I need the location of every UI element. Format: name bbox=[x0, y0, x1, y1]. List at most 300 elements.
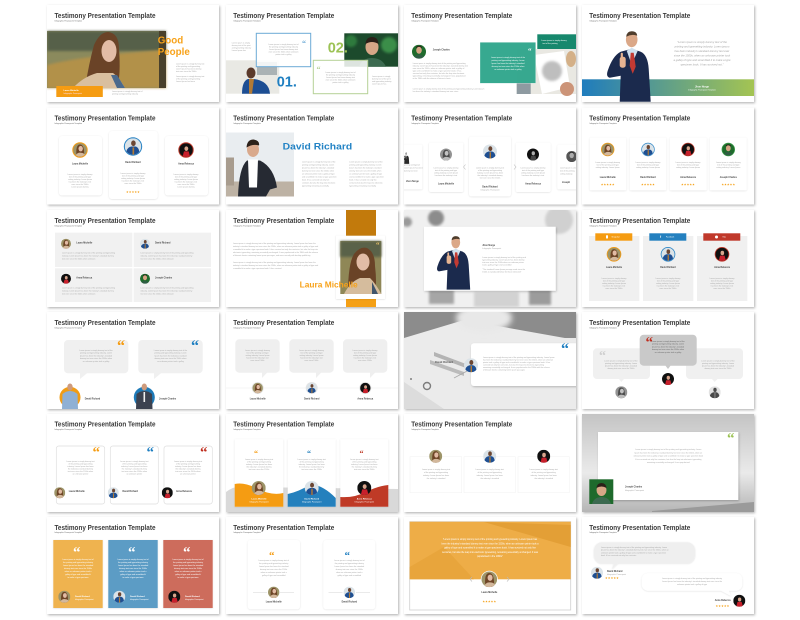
card: Facebook: has been the industry's text bbox=[657, 284, 680, 288]
person: David Richard bbox=[60, 384, 101, 409]
card: Laura Michelle: Laura Michelle bbox=[251, 498, 267, 500]
card: Snapchat: Snapchat bbox=[612, 236, 620, 239]
framed panel: galley of type and scrambled it to make a type specimen book. It has survived not only five bbox=[444, 547, 537, 550]
text block: industry's standard dummy text ever since the 1500s, when an unknown printer took a galley of type and bbox=[233, 245, 318, 248]
framed panel: centuries, but also the leap into electronic typesetting, remaining essentially unchanged. It was bbox=[442, 551, 539, 554]
heading: Good People: People bbox=[158, 47, 190, 58]
card: David Richard: of the printing and typesetting bbox=[122, 462, 146, 466]
card: David Richard: of the printing and typesetting bbox=[300, 460, 324, 464]
slide 13 title: Testimony Presentation Template bbox=[54, 320, 156, 327]
framed panel: been the industry's standard dummy text ever since the 1500s, when an unknown printer took a bbox=[442, 542, 539, 545]
card: Laura Michelle: text ever since the 1500s when bbox=[68, 470, 93, 473]
person: Anna Rebecca: ★★★★★ bbox=[716, 604, 730, 608]
background photo bbox=[404, 304, 576, 409]
card: David Richard: industry. Lorem Ipsum has been bbox=[121, 465, 147, 468]
card: Laura Michelle: Laura Michelle bbox=[266, 602, 282, 604]
card: Snapchat: ever since the 1500s bbox=[605, 287, 623, 290]
bubble 2: Lorem ipsum is simply dummy text of the bbox=[154, 349, 187, 352]
card: Laura Michelle: industry. Lorem Ipsum has been bbox=[423, 474, 449, 477]
card: Laura Michelle gray: Lorem ipsum is simply dummy bbox=[434, 166, 458, 170]
bubble and person: Laura Michelle: has been the industry's text bbox=[246, 356, 269, 360]
text block: Lorem Ipsum has been dummy bbox=[176, 68, 201, 70]
card: blue outline testimonial bbox=[256, 33, 311, 67]
card: Anna Rebecca: “ bbox=[360, 449, 364, 458]
bubble left: Ipsum has been the industry's standard bbox=[605, 364, 637, 368]
side text left: Lorem ipsum is simply bbox=[232, 42, 250, 44]
bubble 1 bbox=[64, 338, 128, 379]
slide 6 title: Testimony Presentation Template bbox=[233, 116, 334, 122]
quote text: has been industry's standard dummy text ever bbox=[675, 49, 730, 53]
slide 14 subtitle: Infographic Powerpoint Template bbox=[233, 326, 261, 330]
card: David Richard bbox=[464, 450, 515, 493]
quote text: "Lorem ipsum is simply dummy text of the bbox=[677, 40, 727, 44]
slide 18 title: Testimony Presentation Template bbox=[233, 422, 334, 428]
card: Jhon Norge: took a galley of type and scrambled bbox=[482, 264, 511, 266]
text block: type and scrambled it to make a type specimen book. It has bbox=[413, 70, 461, 72]
card: quote: survived not only five centuries, but also the leap into electronic typesetting bbox=[483, 364, 544, 366]
text column 1: an unknown printer took a galley of type bbox=[302, 172, 335, 176]
card: David Richard: “ bbox=[307, 449, 311, 458]
card: Facebook: f bbox=[660, 235, 662, 239]
text block: typesetting, remaining essentially unchanged. It was popularised bbox=[413, 74, 465, 78]
card: dark teal: Lorem ipsum is simply dummy bbox=[541, 39, 567, 42]
card: Snapchat: setting industry. Lorem Ipsum bbox=[602, 282, 626, 285]
panel: Anna Rebecca: Lorem ipsum is simply dummy text of the printing and typesetting bbox=[62, 286, 115, 290]
chat bubble: David: Ipsum has been the industry's standard dummy text ever since the 1500s, when an bbox=[601, 549, 669, 552]
card: David Richard: galley of type and scrambled bbox=[338, 574, 361, 577]
heading: Good People: Good bbox=[158, 36, 183, 46]
card: blue: dummy text ever since the 1500s bbox=[119, 567, 147, 570]
card: Laura Michelle: Laura Michelle bbox=[600, 177, 616, 179]
person: David Richard bbox=[591, 567, 626, 580]
avatar: Anna bbox=[662, 373, 674, 385]
text block: scrambled it to make a type specimen book. It has survived not only five centuries, but also the leap into bbox=[233, 248, 318, 251]
card: Anna Rebecca: of the printing and typesetting bbox=[532, 471, 556, 474]
card: blue outline testimonial: Lorem ipsum is simply dummy text of bbox=[268, 43, 299, 46]
text block: electronic typesetting, remaining essentially unchanged. It was popularised in the 1960s with the release bbox=[233, 251, 318, 254]
arrow: next bbox=[507, 577, 509, 582]
slide 19: faint cards with avatars on top bbox=[410, 422, 569, 493]
slide 24 title: Testimony Presentation Template bbox=[589, 525, 690, 532]
panel: Joseph Charles: industry. Lorem Ipsum has been the industry's standard dummy bbox=[140, 290, 192, 292]
card: Anna Rebecca: ★★★★★ bbox=[681, 182, 695, 186]
card: David Richard center: the industry's standard dummy bbox=[477, 174, 503, 177]
card: Laura Michelle: Lorem Ipsum has been the standard bbox=[259, 565, 289, 568]
card: Jhon Norge: Jhon Norge bbox=[482, 245, 496, 247]
card: teal quote: dummy text ever since the 1500s when bbox=[492, 65, 524, 68]
text block: Lorem ipsum is simply dummy text bbox=[176, 75, 205, 78]
card: Anna Rebecca gray: Anna Rebecca bbox=[525, 182, 542, 186]
card: teal quote bbox=[480, 42, 536, 83]
card: Snapchat: Laura Michelle bbox=[606, 267, 623, 269]
card: Anna Rebecca gray: has been the industry's text bbox=[522, 174, 545, 177]
card: Laura Michelle bbox=[235, 439, 283, 507]
bubble and person: David Richard bbox=[289, 339, 334, 400]
side text right: and typesetting industry bbox=[372, 80, 392, 83]
bubble and person: Anna Rebecca: setting industry. Lorem Ipsum bbox=[353, 354, 377, 357]
slide 9 subtitle: Infographic Powerpoint Template bbox=[54, 224, 82, 228]
quote text: specimen book. It has survived not." bbox=[680, 62, 725, 66]
bubble and person: Anna Rebecca: Anna Rebecca bbox=[357, 398, 374, 400]
card: David Richard bbox=[108, 445, 158, 504]
card: David Richard: David Richard bbox=[125, 162, 141, 164]
slide 17: outlined cards bbox=[54, 422, 212, 504]
person: Anna Rebecca: Anna Rebecca bbox=[715, 599, 731, 602]
slide 21 subtitle: Infographic Powerpoint Template bbox=[54, 531, 82, 534]
slide 21 title: Testimony Presentation Template bbox=[54, 525, 156, 532]
chat bubble: David: book. It has survived not only five centuries bbox=[601, 554, 636, 557]
slide 7: carousel cards bbox=[394, 116, 587, 196]
card: David Richard center: industry. Lorem Ipsum has been bbox=[477, 172, 503, 174]
card: teal quote: Ipsum has been the industry's standard bbox=[492, 62, 524, 65]
card: Anna Rebecca: Anna Rebecca bbox=[680, 176, 697, 179]
card: Facebook: ever since the 1500s bbox=[659, 287, 677, 290]
text column 1: typesetting remaining essentially bbox=[302, 184, 329, 188]
text block: in the 1960s with the release of letraset sheets bbox=[413, 77, 451, 80]
slide 15: David Richard over grey documents bbox=[404, 304, 586, 409]
card: Laura Michelle bbox=[54, 445, 105, 504]
card: far right: Joseph bbox=[562, 182, 571, 184]
card: Snapchat: Lorem ipsum is simply dummy bbox=[602, 277, 626, 280]
text block: Lorem ipsum is simply dummy text of the printing and typesetting industry. Lorem Ipsum bbox=[413, 88, 485, 90]
photo frame: Laura bbox=[336, 236, 385, 299]
panel: Laura Michelle bbox=[55, 233, 132, 267]
card: blue: Lorem Ipsum has been the standard bbox=[118, 564, 148, 567]
text column 1: dummy text ever since the 1500s when bbox=[302, 170, 334, 172]
text block: has been the industry's standard dummy text ever since bbox=[413, 90, 458, 93]
slide 8: four cards bbox=[589, 116, 747, 190]
bubble 2: “ bbox=[191, 338, 199, 355]
bubble and person: David Richard: Lorem ipsum is simply dummy bbox=[299, 349, 324, 352]
slide 2: two testimonials 01 02 bbox=[226, 13, 398, 94]
card: Anna Rebecca: text of the printing and type bbox=[175, 176, 197, 178]
photo: smiling man on leaves bbox=[344, 33, 398, 67]
bubble and person: Anna Rebecca: Lorem ipsum is simply dummy bbox=[353, 349, 377, 352]
side text left: and typesetting industry bbox=[232, 46, 251, 50]
card: teal quote: “ bbox=[528, 47, 532, 55]
card: orange: dummy text ever since the 1500s bbox=[64, 567, 92, 570]
bubble 1: printing and typesetting industry. Lorem bbox=[80, 352, 113, 355]
card: orange: David Richard bbox=[75, 596, 90, 598]
card: far left bbox=[394, 144, 423, 190]
card: blue outline testimonial: “ bbox=[302, 39, 306, 48]
card: Laura Michelle: “ bbox=[269, 550, 275, 562]
bubble 2: printing and typesetting industry. Lorem bbox=[154, 352, 187, 355]
card: David Richard: when an unknown printer took a bbox=[336, 571, 363, 574]
card: Anna Rebecca: the industry's standard dummy bbox=[352, 466, 377, 468]
slide 19 subtitle: Infographic Powerpoint Template bbox=[411, 428, 439, 431]
slide 12 subtitle: Infographic Powerpoint Template bbox=[589, 224, 617, 228]
panel: David Richard: industry. Lorem Ipsum has been the industry's standard dummy bbox=[140, 254, 192, 258]
card: Anna Rebecca gray: text of the printing and type bbox=[522, 169, 544, 172]
text column 2: Lorem ipsum is simply dummy text of the bbox=[349, 160, 383, 164]
card: Facebook bbox=[643, 233, 693, 301]
bubble 1: dummy text ever since the 1500s when bbox=[80, 357, 112, 360]
card: Anna Rebecca: Lorem ipsum is simply dummy bbox=[676, 161, 700, 164]
card: Anna Rebecca: “ bbox=[200, 445, 208, 461]
text column 1: book. It has survived not only five bbox=[302, 178, 329, 182]
bubble and person: David Richard: setting industry. Lorem Ipsum bbox=[299, 354, 324, 357]
card: red: galley of type and scrambled it bbox=[175, 573, 201, 576]
slide 5 subtitle: Infographic Powerpoint Template bbox=[54, 122, 82, 125]
card: Anna Rebecca: Lorem ipsum is simply dummy text bbox=[174, 460, 203, 463]
card: Anna Rebecca: Lorem ipsum dummy bbox=[177, 186, 195, 188]
card: quote: Lorem ipsum is simply dummy text of the printing and typesetting industry. Lorem bbox=[635, 448, 702, 451]
card: Joseph Charles bbox=[710, 138, 747, 190]
bubble and person: Laura Michelle: text of the printing and type bbox=[246, 352, 269, 354]
card: Anna Rebecca: Lorem ipsum is simply dummy bbox=[174, 173, 198, 176]
slide 16 title: Testimony Presentation Template bbox=[589, 320, 690, 327]
text block: ever since the 1500s, when an unknown printer took a galley of bbox=[413, 67, 465, 70]
card: David Richard: Lorem ipsum is simply dummy text bbox=[120, 460, 149, 463]
card: Laura Michelle: setting industry. Lorem Ipsum bbox=[596, 166, 620, 169]
card: Facebook: text of the printing and type bbox=[657, 280, 679, 282]
card: green outline testimonial: ever since the 1500s when unknown bbox=[326, 78, 355, 82]
card: blue: galley of type and scrambled it bbox=[120, 573, 146, 576]
avatar: David grey bbox=[709, 386, 721, 398]
name: Laura Michelle: Laura Michelle bbox=[481, 592, 498, 594]
person: David Richard: David Richard bbox=[85, 398, 101, 400]
card: blue outline testimonial: the printing and typesetting industry bbox=[269, 46, 298, 48]
card: David Richard: David Richard bbox=[122, 491, 139, 493]
slide 16 subtitle: Infographic Powerpoint Template bbox=[589, 326, 617, 330]
card: blue: Lorem ipsum is simply dummy text of bbox=[117, 558, 149, 561]
card: David Richard center bbox=[469, 136, 511, 196]
bubble 1: Lorem ipsum is simply dummy text of the bbox=[79, 349, 113, 352]
card: blue: the printing and typesetting industry bbox=[118, 561, 148, 564]
card: David Richard: has been the industry's text bbox=[122, 180, 145, 182]
card: Laura Michelle: the industry's standard dummy bbox=[246, 466, 272, 468]
card: David Richard: Lorem Ipsum has been the standard bbox=[334, 565, 364, 568]
framed panel: popularised in the 1960s" bbox=[477, 555, 503, 558]
card: Joseph Charles: Joseph Charles bbox=[720, 177, 738, 179]
card: Snapchat: has been the industry's text bbox=[603, 284, 626, 288]
card: blue: Infographic Powerpoint bbox=[130, 598, 149, 601]
card: Anna Rebecca gray: setting industry. Lorem Ipsum bbox=[521, 172, 545, 174]
card: Jhon Norge bbox=[424, 227, 556, 291]
chat bubble: David: Lorem ipsum is simply dummy text of the printing and typesetting industry. Lorem bbox=[601, 546, 668, 549]
text column 1: printing and typesetting industry. Lorem bbox=[302, 164, 335, 166]
card: far left: Lorem Ipsum has been bbox=[404, 166, 423, 170]
text column 2: book. It has survived not only five bbox=[349, 178, 377, 182]
card: blue: “ bbox=[128, 545, 136, 561]
slide 4: Jhon Norge gradient bbox=[582, 13, 754, 102]
card: Snapchat: text of the printing and type bbox=[603, 280, 625, 282]
number 01: 01. bbox=[277, 75, 297, 91]
slide 4 title: Testimony Presentation Template bbox=[589, 13, 690, 20]
text block: of letraset sheets containing lorem ipsum passages, and more recently with desktop publishing bbox=[233, 254, 310, 257]
card: David Richard bbox=[288, 439, 336, 507]
panel: Anna Rebecca: Anna Rebecca bbox=[76, 276, 93, 279]
card: far right: Lorem ipsum is sim bbox=[560, 166, 576, 170]
card: David Richard: industry. Lorem Ipsum has been bbox=[299, 463, 325, 466]
card: orange: galley of type and scrambled it bbox=[65, 573, 91, 576]
bubble and person: Anna Rebecca: ever since 1500s bbox=[358, 359, 372, 362]
number 02: 02. bbox=[328, 40, 348, 56]
slide 11: Jhon Norge on grey photo bbox=[402, 206, 576, 307]
slide 2 subtitle: Infographic Powerpoint Template bbox=[233, 20, 261, 22]
card: Laura Michelle: an unknown printer bbox=[73, 472, 89, 476]
card: far right: text of the printing bbox=[560, 170, 575, 172]
card: Jhon Norge: Lorem ipsum is simply dummy text of the printing and bbox=[482, 256, 526, 259]
card: far left: printing and typeset bbox=[404, 164, 421, 166]
card: Laura Michelle: industry. Lorem Ipsum has been bbox=[67, 465, 94, 468]
card: David Richard: the industry's standard dummy bbox=[299, 466, 324, 468]
card: Facebook: Lorem ipsum is simply dummy bbox=[656, 277, 680, 280]
card: Yelp bbox=[697, 233, 747, 301]
slide 1 title: Testimony Presentation Template bbox=[54, 13, 156, 20]
text block: Lorem ipsum is simply dummy text of bbox=[112, 90, 143, 93]
arrow: previous bbox=[470, 577, 472, 582]
card: blue outline testimonial: printer took a galley bbox=[275, 53, 292, 56]
text block: text ever since the 1500s bbox=[176, 70, 197, 73]
text column 2: dummy text ever since the 1500s when bbox=[349, 170, 381, 172]
bubble and person: David Richard: David Richard bbox=[304, 398, 320, 400]
card: Anna Rebecca: industry. Lorem Ipsum has been bbox=[351, 463, 377, 466]
slide 7 title: Testimony Presentation Template bbox=[411, 116, 512, 122]
card: David Richard: text ever since the 1500s when bbox=[122, 470, 147, 473]
text block: of the printing and typesetting bbox=[176, 65, 200, 68]
bubble center highlighted: Ipsum has been the industry's standard bbox=[652, 345, 684, 348]
side text right: dummy text of the print bbox=[372, 78, 391, 80]
card: orange: “ bbox=[73, 545, 81, 561]
slide 14: three bubbles timeline bbox=[226, 320, 398, 400]
card: Laura Michelle bbox=[590, 138, 626, 190]
card: David Richard bbox=[109, 131, 158, 199]
person: David Richard: Infographic Powerpoint bbox=[607, 573, 626, 576]
card: red: Lorem ipsum is simply dummy text of bbox=[172, 558, 204, 561]
text block: Lorem ipsum is simply dummy text of the printing and typesetting industry. Lorem Ipsum has been the bbox=[233, 261, 316, 264]
card: David Richard center: Lorem ipsum is simply dummy text bbox=[476, 166, 505, 170]
bubble 2: an unknown printer took a galley bbox=[157, 360, 184, 363]
card: Laura Michelle: ★★★★★ bbox=[601, 182, 615, 186]
card: Anna Rebecca: the industry's standard bbox=[534, 477, 553, 480]
card: orange: to make a type specimen bbox=[67, 576, 89, 579]
card: Anna Rebecca: of the printing and typesetting bbox=[352, 460, 376, 464]
card: quote: printer took a galley of type and scrambled it to make a type specimen book. It has bbox=[483, 361, 550, 364]
photo: woman in park bbox=[47, 31, 166, 88]
slide 9 title: Testimony Presentation Template bbox=[54, 218, 156, 225]
card: Anna Rebecca: Lorem ipsum is simply dummy text bbox=[530, 468, 558, 471]
gradient name bar bbox=[582, 79, 754, 96]
card: teal quote: Lorem ipsum is simply dummy text of the bbox=[491, 56, 525, 59]
card: teal quote: an unknown printer took a galley bbox=[494, 68, 522, 71]
card: Laura Michelle: text of the printing and type bbox=[69, 176, 91, 178]
panel: Joseph Charles: Joseph Charles bbox=[155, 277, 173, 279]
card: quote: Lorem ipsum is simply dummy text of the printing and typesetting industry. Lorem Ipsum bbox=[483, 356, 555, 359]
bubble left: printing and typesetting industry. Lorem bbox=[605, 362, 638, 365]
card: Laura Michelle gray bbox=[429, 142, 464, 192]
card: David Richard center: David Richard bbox=[482, 186, 498, 188]
panel: Joseph Charles bbox=[134, 268, 211, 302]
card: orange: Lorem ipsum is simply dummy text of bbox=[62, 558, 94, 561]
card: Laura Michelle gray: text of the printing and type bbox=[435, 169, 457, 172]
card: David Richard: ★★★★★ bbox=[126, 190, 140, 194]
card: David Richard bbox=[323, 540, 375, 609]
bubble and person: Laura Michelle: Laura Michelle bbox=[250, 398, 266, 400]
bubble left: dummy text ever since the 1500s bbox=[607, 367, 635, 370]
slide 21: coloured image cards bbox=[53, 525, 213, 608]
side text right: Lorem Ipsum has bbox=[372, 82, 386, 86]
bubble 1: “ bbox=[117, 338, 125, 355]
card: Laura Michelle: Lorem ipsum is simply dummy text bbox=[66, 460, 95, 463]
card: Snapchat bbox=[589, 233, 639, 301]
bubble center highlighted: dummy text ever since the 1500s when bbox=[652, 348, 684, 351]
card: green outline testimonial: Lorem ipsum is simply dummy text of bbox=[325, 71, 356, 74]
card: quote: “ bbox=[727, 431, 735, 447]
bubble right: printing and typesetting industry. Lorem bbox=[702, 362, 735, 365]
slide 13: two speech bubbles with men bbox=[54, 320, 203, 409]
card: Laura Michelle: Lorem ipsum is simply dummy text bbox=[245, 458, 274, 461]
card: Laura Michelle: Laura Michelle bbox=[72, 164, 89, 166]
card: blue outline testimonial: ever since the 1500s when unknown bbox=[269, 50, 298, 54]
person: David Richard: ★★★★★ bbox=[605, 576, 619, 580]
person: Anna Rebecca bbox=[715, 595, 745, 608]
card: quote: It has survived not only five centuries, but also the leap into electronic typesetting bbox=[635, 458, 701, 461]
card: Anna Rebecca: Anna Rebecca bbox=[357, 498, 373, 500]
card: Anna Rebecca: Lorem ipsum is simply dummy text bbox=[350, 458, 379, 461]
chat bubble: Anna bbox=[642, 573, 742, 596]
chat bubble: Anna: Lorem ipsum is simply dummy text of the printing and typesetting industry bbox=[662, 577, 722, 580]
card: Laura Michelle bbox=[59, 136, 102, 196]
card: blue bbox=[108, 540, 158, 608]
photo: Joseph bbox=[589, 479, 613, 504]
card: Laura Michelle: setting industry. Lorem Ipsum bbox=[68, 178, 92, 181]
card: red: dummy text ever since the 1500s bbox=[174, 567, 202, 570]
bubble and person: David Richard: text of the printing and type bbox=[300, 352, 323, 354]
card: Laura Michelle: Infographic Powerpoint bbox=[249, 500, 269, 504]
card: David Richard center: Infographic Powerpoint bbox=[481, 188, 500, 192]
bubble and person: Laura Michelle: setting industry. Lorem Ipsum bbox=[245, 354, 270, 357]
card: David Richard: setting industry. Lorem Ipsum bbox=[636, 166, 660, 169]
bubble left bbox=[593, 348, 650, 382]
bubble and person: David Richard: ever since 1500s bbox=[305, 359, 319, 362]
chat bubble: David: unknown printer took a galley of type and scrambled it to make a type specimen bbox=[601, 551, 666, 554]
card: green outline testimonial bbox=[313, 60, 368, 94]
name: Laura Michelle: Laura Michelle bbox=[300, 281, 358, 290]
slide 22 title: Testimony Presentation Template bbox=[233, 525, 334, 532]
card: Anna Rebecca: an unknown printer bbox=[180, 472, 196, 476]
card: green outline testimonial: printer took a galley bbox=[332, 81, 349, 84]
card: red: Lorem Ipsum has been the standard bbox=[173, 564, 203, 567]
card: Anna Rebecca: Anna Rebecca bbox=[178, 162, 195, 166]
card: David Richard: Lorem ipsum is simply dummy bbox=[121, 172, 145, 175]
slide 18 subtitle: Infographic Powerpoint Template bbox=[233, 428, 261, 431]
card: Jhon Norge: text ever since the 1500s when an unknown printer bbox=[482, 261, 524, 264]
text column 1: Lorem ipsum is simply dummy text of the bbox=[302, 160, 335, 164]
bubble and person: Anna Rebecca bbox=[343, 339, 387, 400]
slide 6: David Richard bbox=[226, 116, 384, 196]
card: red: when an unknown printer took a bbox=[175, 570, 202, 573]
card: Anna Rebecca: setting industry. Lorem Ipsum bbox=[174, 178, 198, 181]
card: Anna Rebecca: industry. Lorem Ipsum has been bbox=[531, 474, 557, 477]
bubble left: “ bbox=[599, 349, 606, 364]
text column 2: centuries but also the leap into electronic bbox=[349, 182, 383, 184]
card: Laura Michelle: the printing and typesetting industry bbox=[259, 562, 288, 565]
card: Yelp: text of the printing and type bbox=[711, 280, 733, 282]
slide 12 title: Testimony Presentation Template bbox=[589, 218, 690, 225]
slide 10: Laura Michelle portrait bbox=[233, 210, 385, 307]
card: Laura Michelle: ever since the 1500s bbox=[71, 183, 89, 186]
card: red: “ bbox=[183, 545, 191, 561]
card: Laura Michelle gray: has been the industry's text bbox=[435, 174, 458, 177]
text column 2: printing and typesetting industry. Lorem bbox=[349, 164, 382, 166]
card: Laura Michelle: industry. Lorem Ipsum has been bbox=[246, 463, 272, 466]
framed panel: "Lorem ipsum is simply dummy text of the printing and typesetting industry. Lorem Ipsum has bbox=[443, 538, 538, 541]
slide 3: Joseph Charles teal bbox=[411, 13, 576, 96]
card: Anna Rebecca bbox=[340, 439, 388, 507]
bubble 1: Ipsum has been the industry's standard bbox=[80, 354, 112, 357]
